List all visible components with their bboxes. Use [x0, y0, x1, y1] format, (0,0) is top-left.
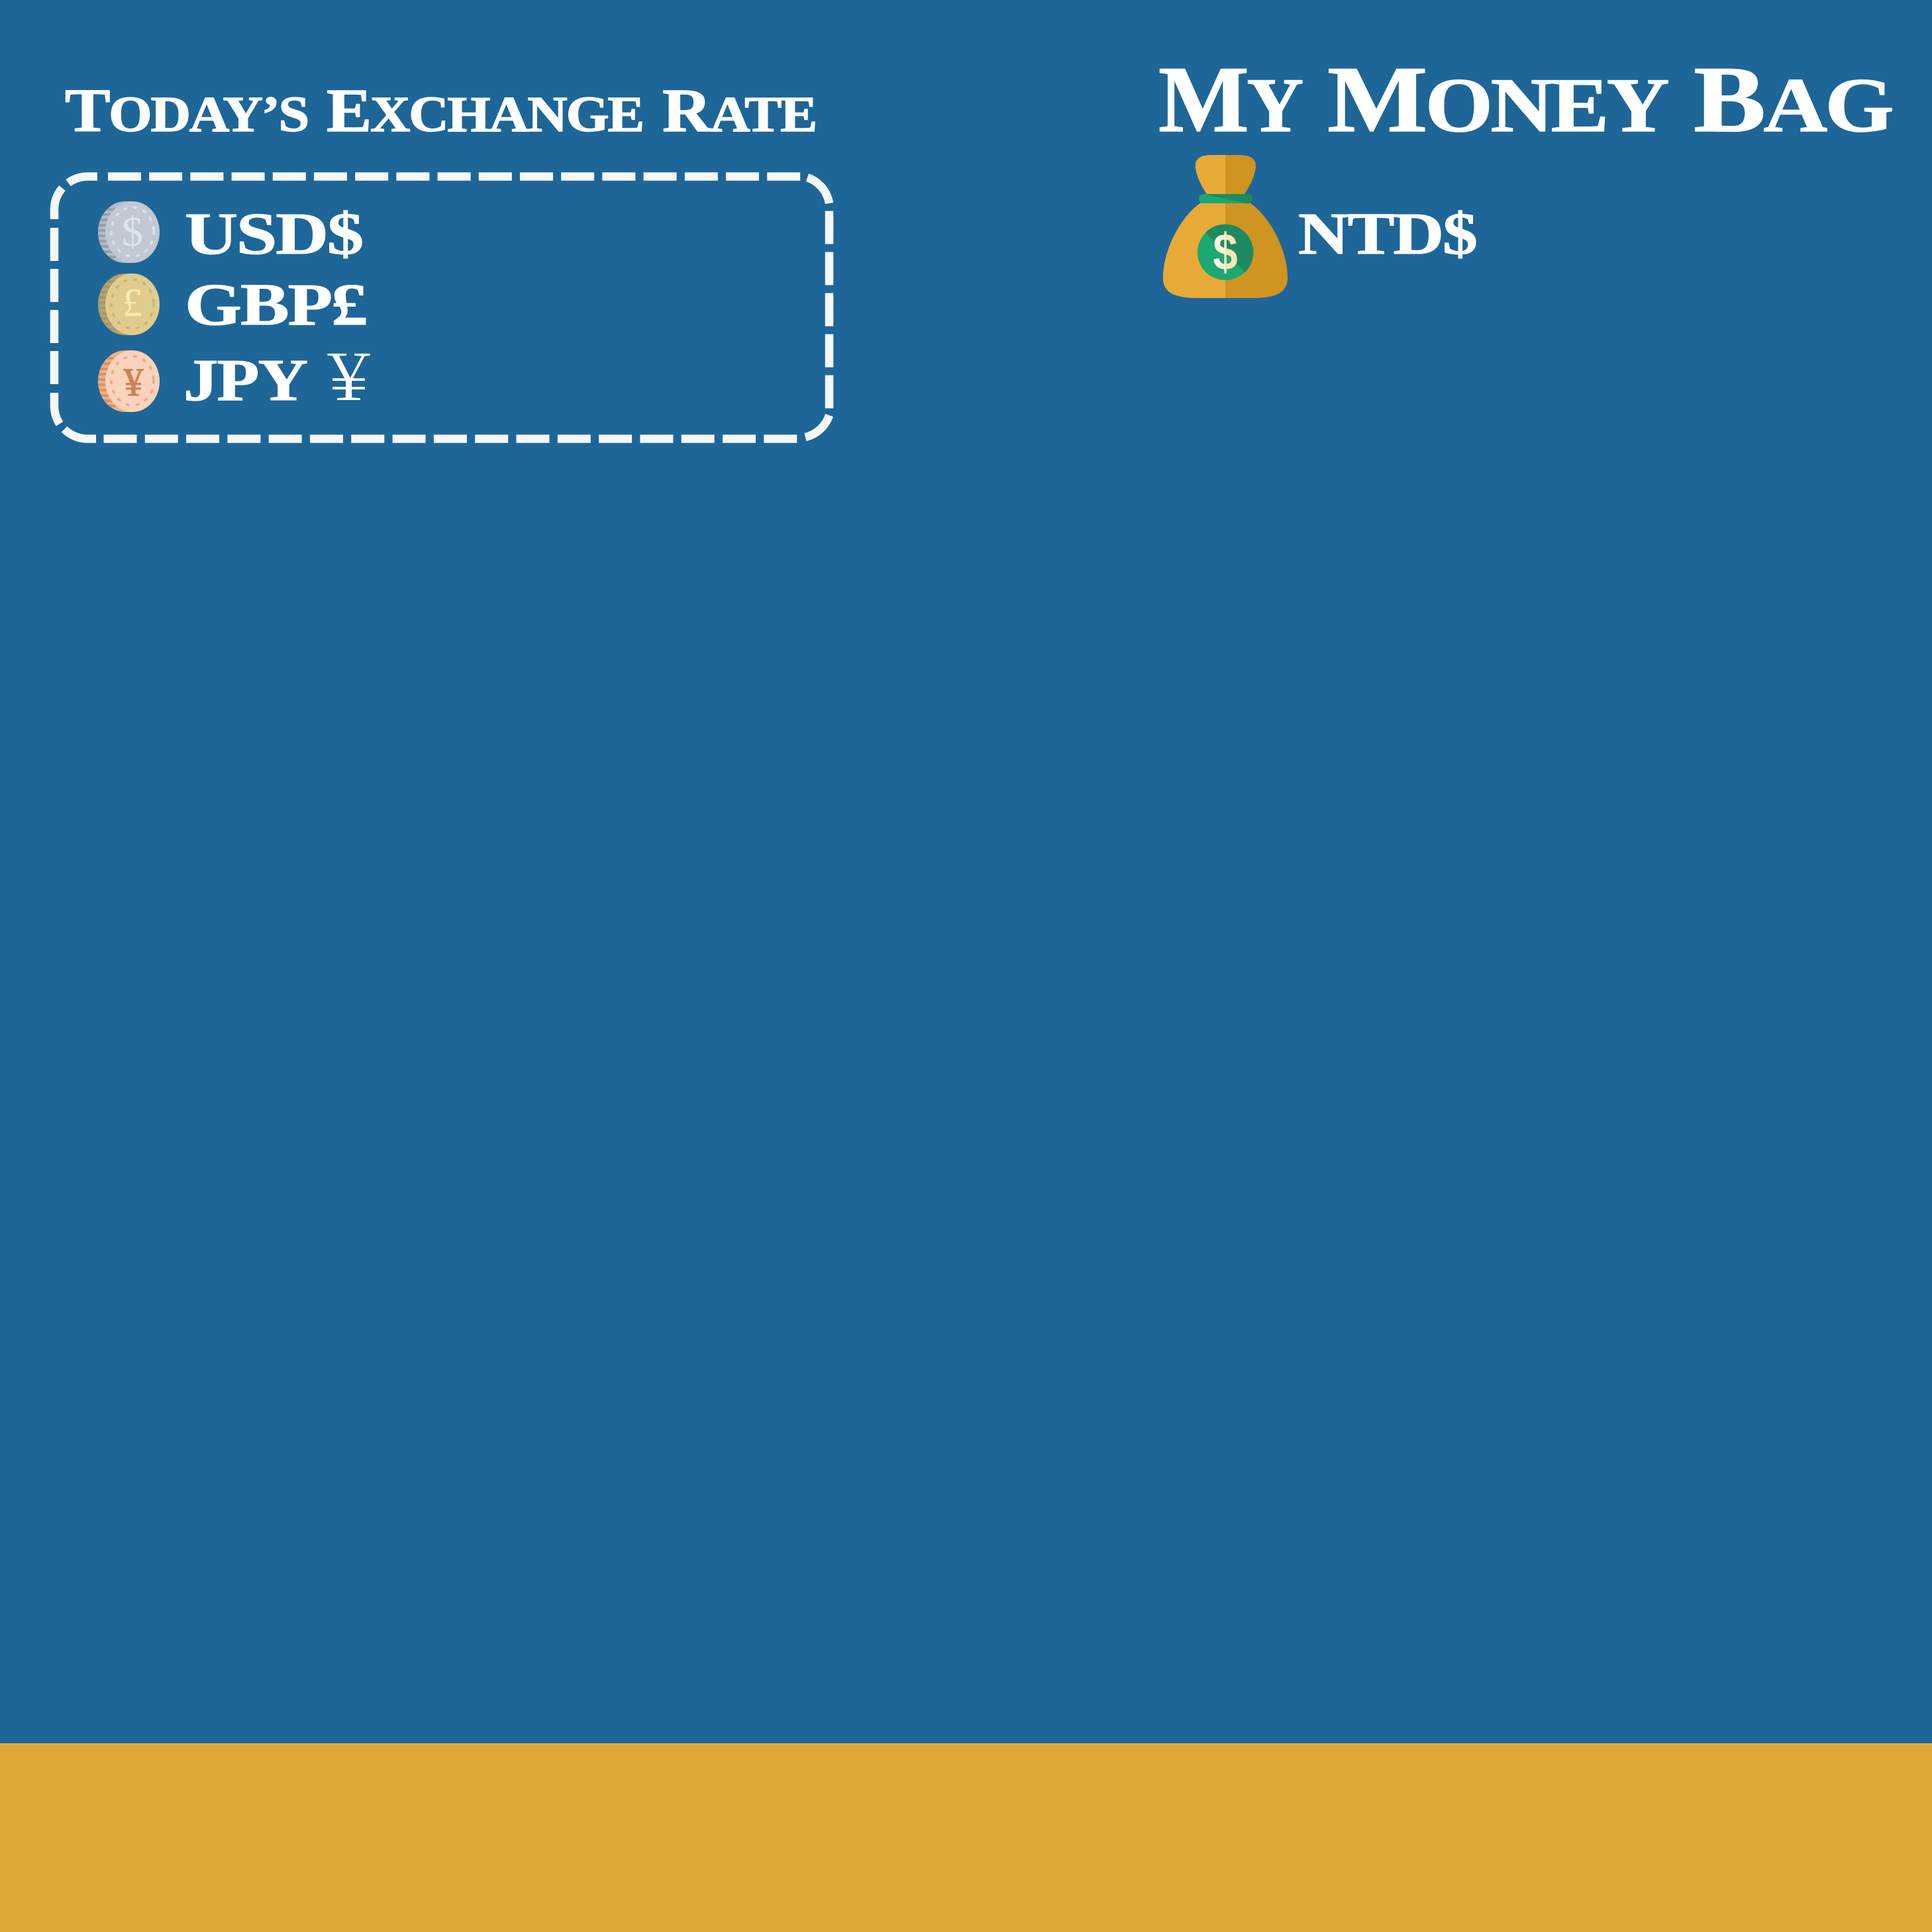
icon: money bag: $: [1213, 223, 1238, 281]
heading: my money bag: MY: [1158, 47, 1303, 152]
label: USD: USD$: [185, 201, 362, 267]
heading: today's exchange rate: RATE: [662, 77, 816, 145]
heading: today's exchange rate: TODAY’S: [65, 77, 308, 145]
icon: copper yen coin: ¥: [123, 360, 143, 404]
icon: gold pound coin: £: [123, 281, 142, 325]
icon: gold pound coin: [96, 274, 160, 335]
gold footer band: [0, 1743, 1932, 1932]
icon: silver dollar coin: [96, 201, 160, 263]
heading: today's exchange rate: EXCHANGE: [327, 77, 643, 145]
label: JPY: JPY: [183, 348, 307, 413]
label: yen symbol: ¥: [327, 324, 370, 419]
label: NTD: NTD$: [1298, 201, 1476, 267]
icon: money bag: [1163, 155, 1288, 298]
heading: my money bag: [1158, 47, 1892, 152]
heading: my money bag: MONEY: [1327, 47, 1668, 152]
icon: copper yen coin: [96, 350, 160, 412]
label: GBP: GBP£: [185, 272, 366, 338]
heading: today's exchange rate: [65, 77, 816, 145]
heading: my money bag: BAG: [1694, 47, 1892, 152]
dashed exchange rate panel: [54, 176, 829, 438]
icon: silver dollar coin: $: [122, 208, 143, 255]
